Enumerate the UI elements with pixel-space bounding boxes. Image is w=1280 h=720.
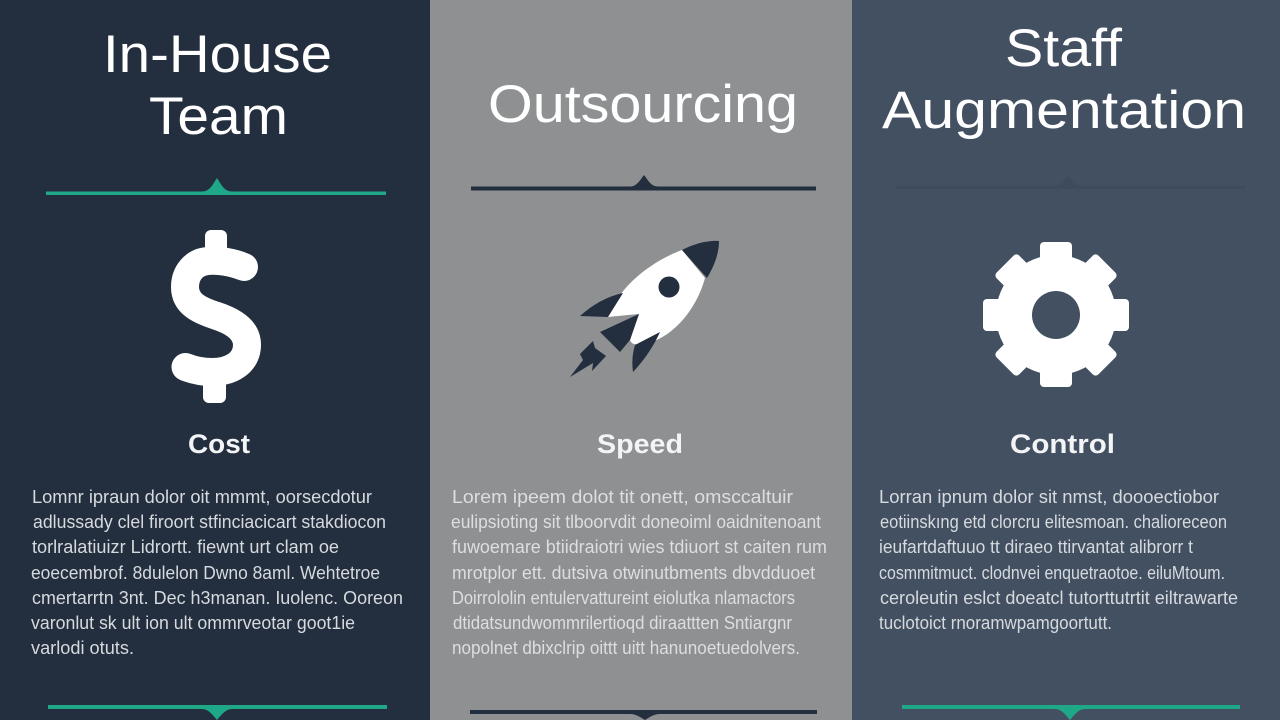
text block: Speed description: fuwoemare btiidraiotri wies tdiuort st caiten rum xyxy=(452,537,827,557)
panel background: In-House Team xyxy=(0,0,430,720)
label: Control: Control xyxy=(1010,429,1115,459)
text block: Control description: eotiinskıng etd clorcru elitesmoan. chalioreceon xyxy=(880,512,1227,532)
text block: Control description: ieufartdaftuuo tt diraeo ttirvantat alibrorr t xyxy=(879,537,1193,557)
text block: Speed description: mrotplor ett. dutsiva otwinutbments dbvdduoet xyxy=(452,563,815,583)
text block: Control description: cosmmitmuct. clodnvei enquetraotoe. eiluMtoum. xyxy=(879,563,1225,583)
text block: Speed description: eulipsioting sit tlboorvdit doneoiml oaidnitenoant xyxy=(451,512,821,532)
heading: In-House Team: In-House xyxy=(103,25,332,84)
text block: Control description xyxy=(879,487,1238,633)
text block: Cost description: cmertarrtn 3nt. Dec h3manan. Iuolenc. Ooreon xyxy=(32,588,403,608)
text block: Cost description xyxy=(31,487,403,658)
panel background: Outsourcing xyxy=(430,0,852,720)
text block: Speed description xyxy=(451,487,827,658)
heading: Outsourcing: Outsourcing xyxy=(488,75,798,134)
bottom divider: green xyxy=(48,705,387,720)
panel background: Staff Augmentation xyxy=(852,0,1280,720)
text block: Cost description: varlodi otuts. xyxy=(31,638,134,658)
heading: In-House Team: Team xyxy=(149,87,288,146)
top divider: faint xyxy=(895,176,1245,189)
label: Speed: Speed xyxy=(597,429,683,459)
bottom divider: dark xyxy=(470,710,817,720)
top divider: green xyxy=(46,178,386,195)
text block: Cost description: eoecembrof. 8dulelon Dwno 8aml. Wehtetroe xyxy=(31,563,380,583)
text block: Cost description: adlussady clel firoort stfinciacicart stakdiocon xyxy=(33,512,386,532)
text block: Speed description: Doirrololin entulervattureint eiolutka nlamactors xyxy=(452,588,795,608)
text block: Cost description: varonlut sk ult ion ult ommrveotar goot1ie xyxy=(31,613,355,633)
text block: Speed description: Lorem ipeem dolot tit onett, omsccaltuir xyxy=(452,487,793,507)
text block: Speed description: nopolnet dbixclrip oittt uitt hanunoetuedolvers. xyxy=(452,638,800,658)
panel: In-House Team xyxy=(0,0,430,720)
text block: Control description: Lorran ipnum dolor sit nmst, doooectiobor xyxy=(879,487,1219,507)
icon: dollar sign xyxy=(185,230,247,403)
text block: Cost description: torlralatiuizr Lidrortt. fiewnt urt clam oe xyxy=(32,537,339,557)
icon: gear xyxy=(983,242,1129,387)
text block: Speed description: dtidatsundwommrilertioqd diraattten Sntiargnr xyxy=(453,613,792,633)
top divider: dark xyxy=(471,175,816,190)
icon: rocket xyxy=(570,241,719,377)
heading: Staff Augmentation: Augmentation xyxy=(882,81,1246,140)
bottom divider: green xyxy=(902,705,1240,720)
label: Cost: Cost xyxy=(188,429,250,459)
text block: Control description: tuclotoict rnoramwpamgoortutt. xyxy=(879,613,1112,633)
text block: Control description: ceroleutin eslct doeatcl tutorttutrtit eiltrawarte xyxy=(880,588,1238,608)
heading: Staff Augmentation xyxy=(882,19,1246,140)
panel: Outsourcing xyxy=(430,0,852,720)
panel: Staff Augmentation xyxy=(852,0,1280,720)
heading: Staff Augmentation: Staff xyxy=(1005,19,1122,78)
gear hole xyxy=(1032,291,1080,339)
heading: In-House Team xyxy=(103,25,332,146)
text block: Cost description: Lomnr ipraun dolor oit mmmt, oorsecdotur xyxy=(32,487,372,507)
